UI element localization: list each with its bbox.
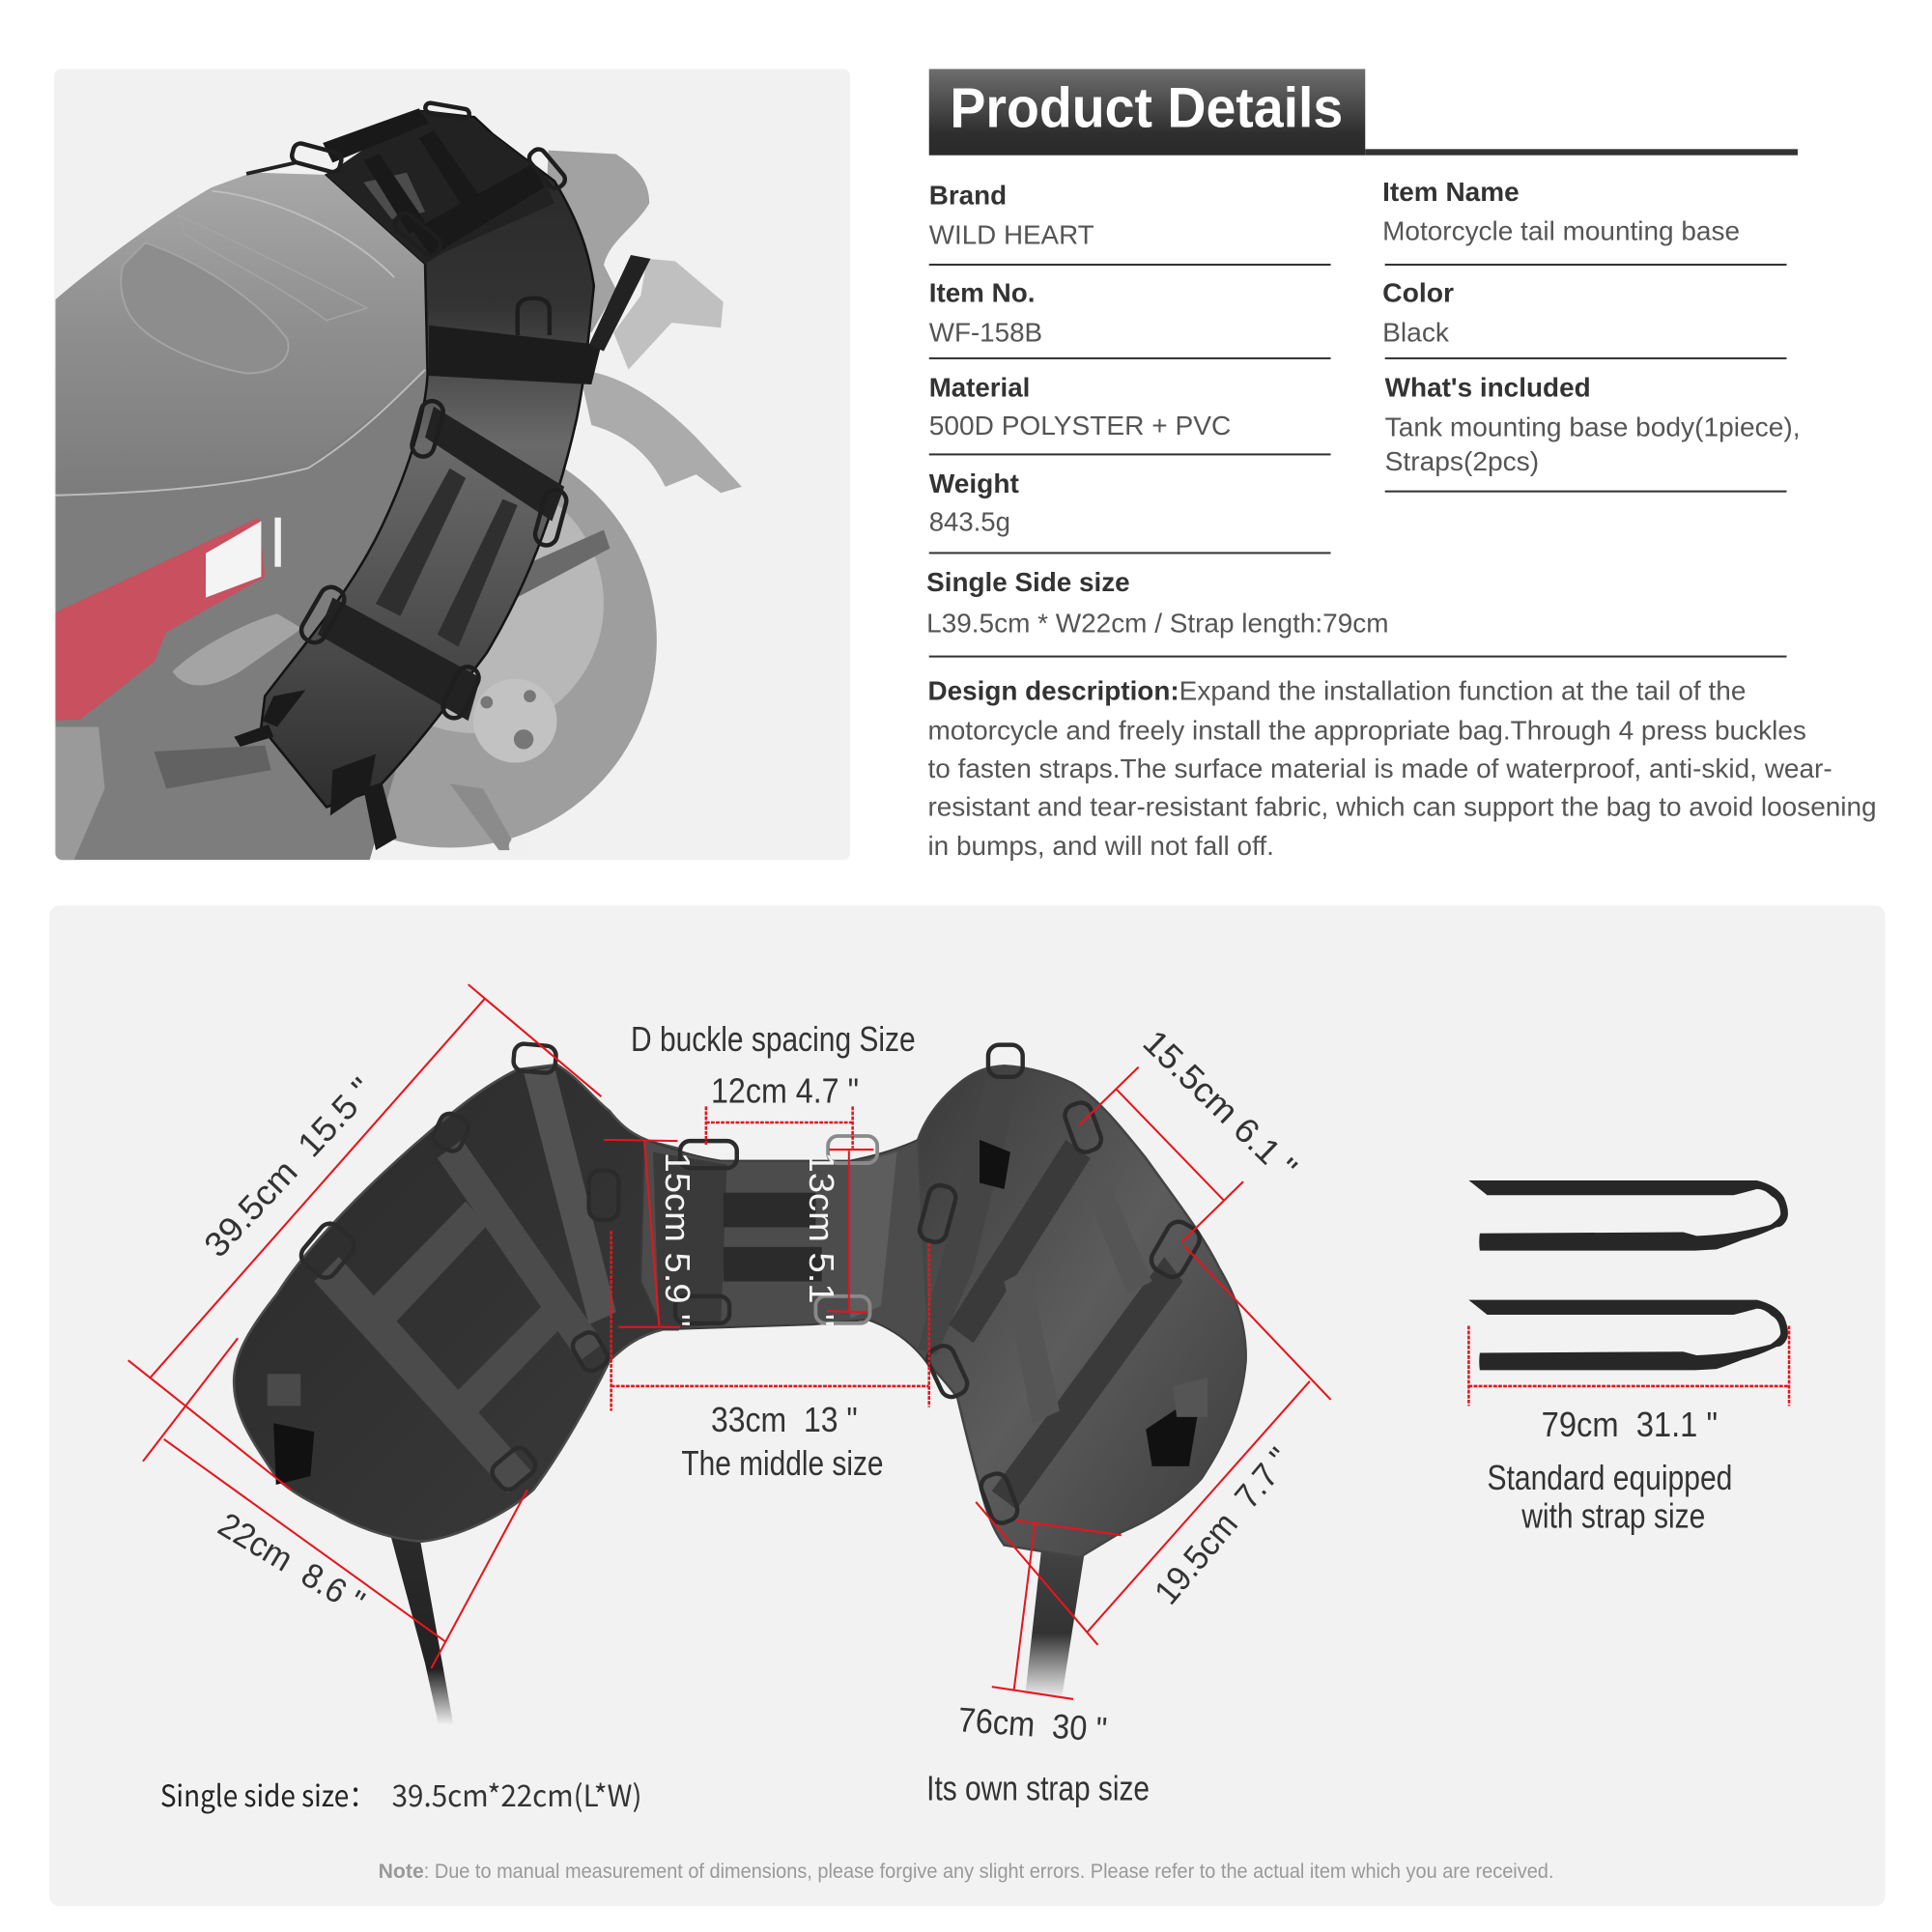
left bottom strap: [382, 1503, 453, 1725]
heading: product details: [929, 69, 1798, 156]
label: own strap measure: 76cm 30 ": [957, 1700, 1108, 1749]
top d-rings: [290, 100, 567, 218]
design description: [927, 675, 1877, 861]
spec: brand: [929, 181, 1331, 266]
label: standard strap measure: 79cm 31.1 ": [1542, 1406, 1718, 1444]
design description: resistant and tear-resistant fabric, which can support the bag to avoid loosening: [927, 791, 1877, 821]
center d-rings: [675, 1136, 877, 1323]
grab rail: [613, 259, 724, 370]
top straps: [323, 108, 545, 256]
right bottom strap: [1025, 1540, 1086, 1695]
mounting base on bike: [234, 102, 650, 850]
sprocket: [473, 679, 557, 763]
spec: what's included: What's included: [1385, 373, 1591, 403]
light glare on top: [363, 173, 425, 219]
label: standard strap: with strap size: [1520, 1497, 1705, 1536]
design description: motorcycle and freely install the appropriate bag.Through 4 press buckles: [927, 715, 1806, 745]
design description: Design description:: [927, 675, 1179, 705]
heading: product details: Product Details: [950, 76, 1343, 139]
spec: brand: Brand: [929, 181, 1007, 211]
spec: color: [1382, 278, 1786, 359]
frame bar: [518, 529, 611, 597]
tail light: [55, 518, 265, 721]
center webbing: [724, 1193, 822, 1282]
tail light lens: [206, 522, 261, 598]
label: bottom right: 19.5cm 7.7 ": [1147, 1440, 1299, 1611]
label: d buckle spacing: 12cm 4.7 ": [711, 1072, 859, 1111]
passenger peg bar: [154, 746, 271, 788]
right wing buckles: [980, 1140, 1208, 1466]
spec: weight: Weight: [929, 469, 1019, 498]
spec: item no: WF-158B: [929, 317, 1042, 347]
panel: dimensions: [49, 906, 1886, 1906]
mid strap: [425, 407, 564, 522]
lengthwise straps: [376, 469, 518, 647]
design description: in bumps, and will not fall off.: [927, 831, 1274, 861]
spec: weight: [929, 469, 1331, 554]
spec: item name: Motorcycle tail mounting base: [1382, 216, 1740, 246]
spec: item name: [1382, 177, 1786, 266]
spec: weight: 843.5g: [929, 507, 1010, 537]
tail section: [542, 151, 649, 332]
spec: material: Material: [929, 373, 1030, 403]
wide horizontal band: [429, 326, 601, 384]
design description: to fasten straps.The surface material is made of waterproof, anti-skid, wear-: [927, 753, 1833, 783]
dimension lines: [128, 984, 1789, 1699]
spec: color: Black: [1382, 317, 1450, 347]
left wing straps: [314, 1067, 616, 1493]
rear fender: [579, 370, 742, 493]
seat rim: [55, 191, 425, 496]
spec: single side size: [926, 567, 1786, 658]
spec: what's included: [1385, 373, 1801, 493]
lower body: [56, 371, 427, 860]
label: length: 39.5cm 15.5 ": [197, 1070, 382, 1264]
right wing d-rings: [918, 1045, 1204, 1526]
right wing straps: [918, 1078, 1182, 1509]
label: standard strap: [1488, 1459, 1732, 1536]
panel: motorcycle photo: [54, 69, 850, 860]
product: center band: [640, 1136, 930, 1368]
spec: single side size: Single Side size: [926, 567, 1130, 597]
lower strap: [318, 598, 480, 721]
left wing buckle: [268, 1374, 314, 1485]
label: 15cm height: 15cm 5.9 ": [658, 1152, 696, 1327]
thin cord: [246, 162, 296, 174]
reflector: [274, 518, 281, 567]
side cover: [173, 613, 301, 686]
mid d-rings: [298, 399, 569, 722]
foot peg: [450, 784, 512, 850]
label: single side size: Single side size：: [160, 1772, 376, 1815]
rear wheel: [386, 469, 657, 848]
label: standard strap: Standard equipped: [1488, 1459, 1732, 1497]
side strap: [589, 255, 650, 352]
top molle section: [327, 111, 554, 264]
product: right wing: [918, 1045, 1246, 1557]
seat pad outline: [121, 242, 289, 373]
spec: brand: WILD HEART: [929, 220, 1094, 250]
label: middle size: The middle size: [681, 1444, 884, 1483]
label: d buckle title: D buckle spacing Size: [631, 1020, 916, 1059]
spec: item no: [929, 278, 1331, 359]
spec: single side size: L39.5cm * W22cm / Strap length:79cm: [926, 608, 1388, 638]
spec: material: [929, 373, 1331, 455]
product: left wing: [234, 1043, 678, 1542]
spec: color: Color: [1382, 277, 1454, 307]
left wing d-rings: [297, 1043, 618, 1493]
label: single side size: 39.5cm*22cm(L*W): [392, 1772, 642, 1815]
spec: what's included: Straps(2pcs): [1385, 446, 1539, 476]
spec: what's included: Tank mounting base body(1piece),: [1385, 412, 1801, 442]
label: 13cm height: 13cm 5.1 ": [802, 1152, 840, 1327]
note: Note: [379, 1861, 424, 1883]
bottom tabs: [234, 690, 397, 850]
standard strap bottom: [1468, 1300, 1788, 1370]
design description: Expand the installation function at the tail of the: [1179, 675, 1746, 705]
note: : Due to manual measurement of dimensions, please forgive any slight errors. Please refer to the actual item which you are received.: [424, 1861, 1553, 1883]
seat pad outer: [206, 247, 369, 321]
spec: material: 500D POLYSTER + PVC: [929, 411, 1231, 440]
label: single side size: [160, 1772, 642, 1815]
standard strap top: [1468, 1180, 1788, 1251]
spec: item name: Item Name: [1382, 177, 1520, 207]
spec: item no: Item No.: [929, 277, 1035, 307]
upper d-ring: [518, 298, 550, 335]
label: middle measure: 33cm 13 ": [711, 1401, 858, 1439]
label: own strap: Its own strap size: [926, 1770, 1150, 1808]
label: top right: 15.5cm 6.1 ": [1136, 1023, 1304, 1187]
seat: [55, 173, 428, 493]
label: width: 22cm 8.6 ": [212, 1505, 371, 1622]
lower left panel: [55, 727, 104, 860]
